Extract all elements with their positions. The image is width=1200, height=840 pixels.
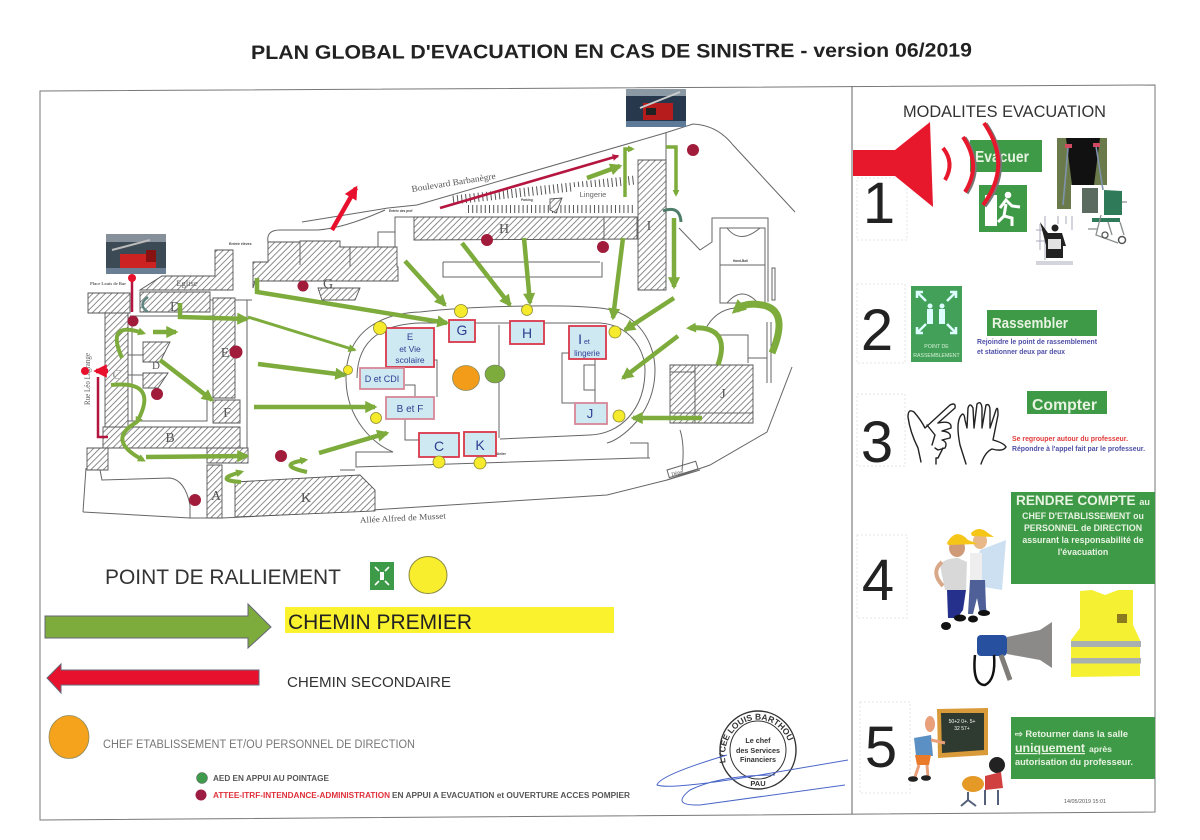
report box: PERSONNEL de DIRECTION bbox=[1024, 523, 1142, 533]
step 4 bbox=[857, 492, 1155, 685]
fire truck photo, top bbox=[626, 89, 686, 127]
staff markers bbox=[128, 144, 699, 506]
legend: head of school: CHEF ETABLISSEMENT ET/OU PERSONNEL DE DIRECTION bbox=[103, 739, 415, 751]
legend: AED: AED EN APPUI AU POINTAGE bbox=[213, 774, 330, 783]
date stamp: 14/05/2019 15:01 bbox=[1064, 799, 1106, 805]
building letters: K bbox=[301, 491, 311, 506]
building letters: A bbox=[211, 489, 222, 504]
stamp and signature: Le chef bbox=[745, 736, 771, 745]
evacuer label: Evacuer bbox=[975, 149, 1029, 166]
legend: primary route bbox=[45, 604, 614, 648]
green evacuation arrows bbox=[146, 166, 702, 457]
street names: Allée Alfred de Musset bbox=[360, 510, 447, 525]
assembly sign bbox=[911, 286, 962, 362]
room C: C bbox=[434, 438, 444, 454]
number 4: 4 bbox=[862, 548, 894, 613]
stamp and signature: LYCEE LOUIS BARTHOU bbox=[719, 714, 794, 763]
number 5 bbox=[860, 702, 910, 793]
street names: Boulevard Barbanègre bbox=[411, 171, 496, 194]
panel: legend bbox=[45, 556, 630, 800]
room I et lingerie: I et bbox=[578, 331, 590, 347]
person in wheelchair bbox=[1036, 216, 1073, 264]
room E: et Vie bbox=[399, 344, 421, 354]
legend: secondary route: CHEMIN SECONDAIRE bbox=[287, 674, 451, 691]
street names: Atelier bbox=[496, 452, 507, 456]
room I et lingerie: lingerie bbox=[574, 349, 600, 358]
panel: evacuation steps bbox=[853, 102, 1155, 806]
room D et CDI: D et CDI bbox=[365, 374, 399, 384]
report box: RENDRE COMPTE au bbox=[1016, 493, 1150, 508]
compter instructions: Se regrouper autour du professeur. bbox=[1012, 436, 1128, 443]
bullhorn bbox=[974, 622, 1052, 685]
return box: uniquement bbox=[1015, 741, 1085, 755]
building letters: H bbox=[499, 222, 509, 237]
step 3 bbox=[857, 391, 1145, 475]
number 2 bbox=[857, 284, 905, 363]
room I et lingerie bbox=[569, 326, 606, 359]
counting hands bbox=[908, 403, 1006, 464]
report box bbox=[1011, 492, 1155, 584]
room J: J bbox=[587, 406, 593, 421]
site outlines bbox=[83, 124, 795, 518]
assembly sign: POINT DE bbox=[924, 344, 949, 350]
return box: après bbox=[1089, 744, 1112, 754]
compter label bbox=[1027, 391, 1107, 414]
lingerie building: Lingerie bbox=[580, 190, 606, 199]
rassembler label bbox=[987, 310, 1097, 336]
exit sign bbox=[979, 185, 1027, 232]
room E: E bbox=[407, 332, 413, 343]
step 5 bbox=[860, 702, 1155, 806]
evacuer label bbox=[970, 140, 1042, 172]
compter label: Compter bbox=[1032, 397, 1097, 414]
building letters: J bbox=[720, 387, 726, 402]
rally points bbox=[344, 304, 625, 469]
building letters: Eglise bbox=[176, 278, 198, 288]
legend: staff bbox=[196, 790, 630, 800]
title: PLAN GLOBAL D'EVACUATION EN CAS DE SINISTRE - version 06/2019 bbox=[251, 39, 972, 64]
compter instructions bbox=[1012, 436, 1145, 453]
street names: Entrée élèves bbox=[229, 242, 252, 246]
room H bbox=[510, 321, 544, 344]
number 1: 1 bbox=[863, 171, 895, 236]
room J bbox=[575, 403, 607, 424]
red secondary routes bbox=[81, 156, 618, 437]
parking stripes bbox=[453, 180, 635, 209]
crutches photo bbox=[1057, 138, 1107, 209]
building letters: B bbox=[165, 431, 175, 446]
building letters bbox=[112, 219, 726, 506]
building letters: C bbox=[112, 368, 122, 383]
legend: rally point: POINT DE RALLIEMENT bbox=[105, 565, 341, 589]
step 2 bbox=[857, 284, 1098, 363]
megaphone bbox=[853, 122, 1000, 207]
panel heading: MODALITES EVACUATION bbox=[903, 102, 1106, 121]
room H: H bbox=[522, 325, 532, 341]
safety vest bbox=[1071, 590, 1141, 677]
number 3 bbox=[857, 394, 905, 475]
panel: site map bbox=[81, 89, 795, 525]
number 1 bbox=[857, 171, 907, 240]
assembly rooms bbox=[360, 320, 607, 457]
compter instructions: Répondre à l'appel fait par le professeur. bbox=[1012, 446, 1145, 453]
street names: Parking bbox=[521, 198, 533, 202]
street names: Rue Léo Lagrange bbox=[82, 353, 92, 405]
street names: Dépot bbox=[671, 469, 685, 478]
buildings bbox=[87, 160, 753, 518]
room B et F bbox=[386, 397, 434, 419]
building letters: D bbox=[152, 360, 160, 372]
number 5: 5 bbox=[865, 715, 897, 780]
fire truck photo, left bbox=[106, 234, 166, 274]
step 1 bbox=[853, 122, 1127, 264]
stamp and signature: PAU bbox=[750, 779, 766, 788]
lingerie building bbox=[572, 187, 616, 205]
building letters: D bbox=[170, 300, 180, 315]
workers bbox=[936, 529, 1006, 630]
return box: autorisation du professeur. bbox=[1015, 757, 1133, 767]
room K bbox=[464, 432, 496, 456]
teacher and blackboard bbox=[908, 708, 988, 782]
stamp and signature bbox=[656, 710, 848, 806]
building letters: G bbox=[323, 277, 333, 292]
room E: scolaire bbox=[395, 355, 425, 365]
wheelchair bbox=[1082, 188, 1127, 244]
building letters: I bbox=[647, 219, 652, 234]
teacher and blackboard: 32 57+ bbox=[954, 726, 970, 732]
room D et CDI bbox=[360, 368, 404, 389]
number 4 bbox=[857, 535, 907, 618]
room C bbox=[419, 433, 459, 457]
legend: staff: EN APPUI A EVACUATION et OUVERTURE ACCES POMPIER bbox=[392, 791, 630, 800]
return box: ⇨ Retourner dans la salle bbox=[1015, 729, 1128, 739]
legend: staff: ATTEE-ITRF-INTENDANCE-ADMINISTRATION bbox=[213, 791, 390, 800]
direction and AED markers bbox=[452, 365, 505, 390]
report box: CHEF D'ETABLISSEMENT ou bbox=[1022, 511, 1144, 521]
number 2: 2 bbox=[861, 298, 893, 363]
return box bbox=[1011, 717, 1155, 779]
teacher and blackboard: 50+2 0+. 5+ bbox=[949, 719, 975, 725]
room K: K bbox=[475, 437, 485, 453]
room G: G bbox=[457, 322, 467, 338]
building letters: E bbox=[221, 346, 229, 361]
legend: secondary route bbox=[47, 664, 451, 693]
street names: Entrée des prof bbox=[389, 209, 413, 213]
number 3: 3 bbox=[861, 410, 893, 475]
curved green arrows bbox=[111, 147, 779, 482]
student bbox=[961, 757, 1005, 806]
building letters: F bbox=[223, 406, 231, 421]
street names bbox=[82, 171, 748, 525]
report box: l'évacuation bbox=[1058, 547, 1108, 557]
street names: Hand-Ball bbox=[733, 259, 748, 263]
report box: assurant la responsabilité de bbox=[1022, 535, 1144, 545]
rassembler instructions: et stationner deux par deux bbox=[977, 349, 1065, 356]
rassembler instructions bbox=[977, 339, 1098, 356]
street names: Place Louis de Bar bbox=[90, 281, 126, 286]
assembly sign: RASSEMBLEMENT bbox=[913, 353, 961, 359]
stamp and signature: des Services bbox=[736, 746, 780, 755]
room B et F: B et F bbox=[397, 404, 423, 415]
rassembler instructions: Rejoindre le point de rassemblement bbox=[977, 339, 1098, 346]
legend: AED bbox=[196, 772, 330, 784]
rassembler label: Rassembler bbox=[992, 315, 1068, 332]
legend: primary route: CHEMIN PREMIER bbox=[288, 611, 472, 634]
room E bbox=[386, 328, 434, 367]
stamp and signature: Financiers bbox=[740, 755, 776, 764]
room G bbox=[449, 320, 475, 342]
legend: head of school bbox=[49, 716, 415, 758]
legend: rally point bbox=[105, 556, 447, 594]
